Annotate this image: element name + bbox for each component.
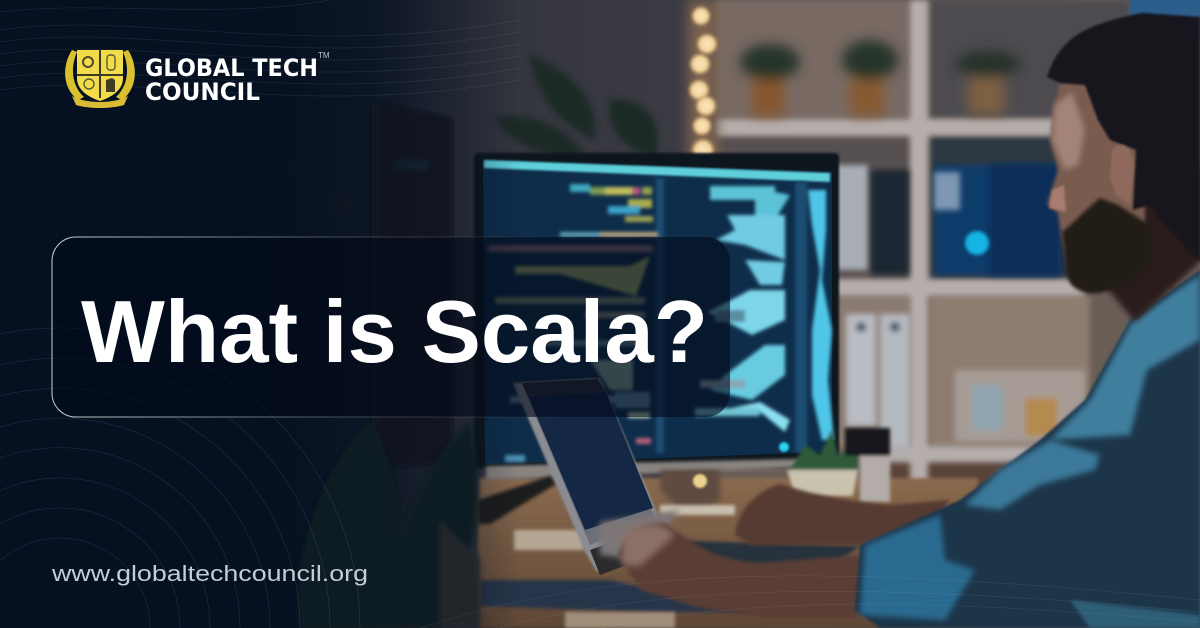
neck [1100, 170, 1200, 322]
left dark gradient overlay [0, 0, 520, 628]
monitor column separators [656, 178, 807, 453]
photo: small plant in white pot [787, 428, 890, 502]
photo: string of warm lights [687, 0, 719, 165]
beard [1062, 198, 1150, 293]
forehead and nose highlight [1052, 92, 1085, 170]
monitor top cyan bar [484, 160, 830, 182]
decorative wave lines top-left [0, 0, 520, 96]
photo: desk mat and papers [480, 580, 760, 628]
photo: potted plants on top shelf [740, 40, 1020, 116]
photo: white binders and frame [846, 314, 1085, 449]
hair [1047, 13, 1200, 262]
photo: man's neck and face [1047, 13, 1200, 322]
photo: bokeh lights beside monitors [287, 159, 355, 237]
title: What is Scala? [81, 282, 708, 381]
photo: laptop [513, 378, 680, 575]
photo: background plant [495, 55, 658, 158]
code lines: left pane [488, 184, 658, 462]
code lines: middle pane [695, 186, 790, 432]
logo: TM [318, 51, 330, 60]
photo: blue box files with cyan light [834, 165, 1060, 275]
code lines: right pane [808, 190, 834, 440]
photo: man's torso and shirt [855, 270, 1200, 628]
ear [1110, 145, 1134, 205]
photo: keyboard [660, 540, 860, 575]
photo: desk [478, 478, 978, 628]
photo: shelf boards [715, 0, 1085, 495]
monitor screen [483, 160, 832, 464]
photo: bookshelf [715, 0, 1200, 502]
title panel [52, 237, 730, 417]
photo: second monitor edge over gradient [372, 102, 452, 470]
photo: monitor bottom bezel and stand [478, 458, 838, 550]
bottom-left plant silhouette [298, 420, 480, 628]
logo [65, 50, 330, 108]
monitor status dot [779, 442, 789, 452]
photo: main monitor [474, 153, 839, 468]
photo: hands on laptop [618, 484, 950, 618]
decorative wave lines bottom-right [420, 576, 1200, 628]
logo: COUNCIL [145, 78, 260, 106]
logo emblem [65, 50, 135, 108]
website url: www.globaltechcouncil.org [51, 561, 368, 586]
logo wordmark: GLOBAL TECH [145, 54, 318, 82]
decorative concentric arcs bottom-left [0, 328, 360, 628]
photo: second monitor, side view [372, 102, 452, 470]
face [1047, 75, 1145, 290]
